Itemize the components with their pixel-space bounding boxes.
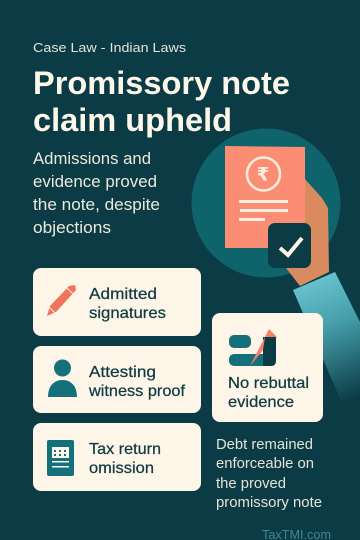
document text lines: [239, 200, 288, 221]
card text: Admitted: [89, 286, 157, 303]
eyebrow label: Case Law - Indian Laws: [33, 40, 187, 55]
icon: rupee circle: ₹: [257, 164, 269, 186]
subtitle: [33, 149, 160, 237]
subtitle: objections: [33, 218, 111, 237]
title: Promissory note: [33, 65, 290, 101]
conclusion text: Debt remained: [216, 437, 313, 453]
card: admitted signatures: [33, 268, 201, 336]
card text: signatures: [89, 305, 166, 322]
icon: rupee circle: [247, 158, 280, 190]
subtitle: evidence proved: [33, 172, 157, 191]
card text: No rebuttal: [228, 375, 309, 392]
card text: [89, 286, 166, 322]
subtitle: Admissions and: [33, 149, 151, 168]
promissory note document: [225, 146, 305, 248]
icon: pencil: [47, 285, 76, 316]
icon: tax form: [47, 440, 74, 476]
card: no rebuttal evidence: [212, 313, 323, 422]
conclusion text: the proved: [216, 476, 286, 492]
icon: broken rebuttal shape: [229, 329, 277, 366]
card text: omission: [89, 460, 154, 477]
card text: [88, 364, 186, 400]
card text: [89, 441, 161, 477]
teal circle backdrop: [192, 128, 340, 278]
card text: Attesting: [89, 364, 156, 381]
illustration: hand holding promissory note: [192, 128, 360, 420]
conclusion text: promissory note: [216, 495, 322, 511]
title: [33, 65, 290, 138]
card text: Tax return: [89, 441, 161, 458]
icon: check badge: [268, 223, 311, 268]
card text: witness proof: [88, 383, 186, 400]
card text: evidence: [228, 394, 294, 411]
subtitle: the note, despite: [33, 195, 160, 214]
conclusion text: [216, 437, 322, 511]
conclusion text: enforceable on: [216, 456, 314, 472]
icon: sleeve cuff: [293, 272, 360, 420]
icon: hand: [286, 178, 329, 286]
card text: [228, 375, 309, 411]
card: attesting witness proof: [33, 346, 201, 413]
title: claim upheld: [33, 102, 232, 138]
card: tax return omission: [33, 423, 201, 491]
icon: person: [48, 360, 77, 397]
